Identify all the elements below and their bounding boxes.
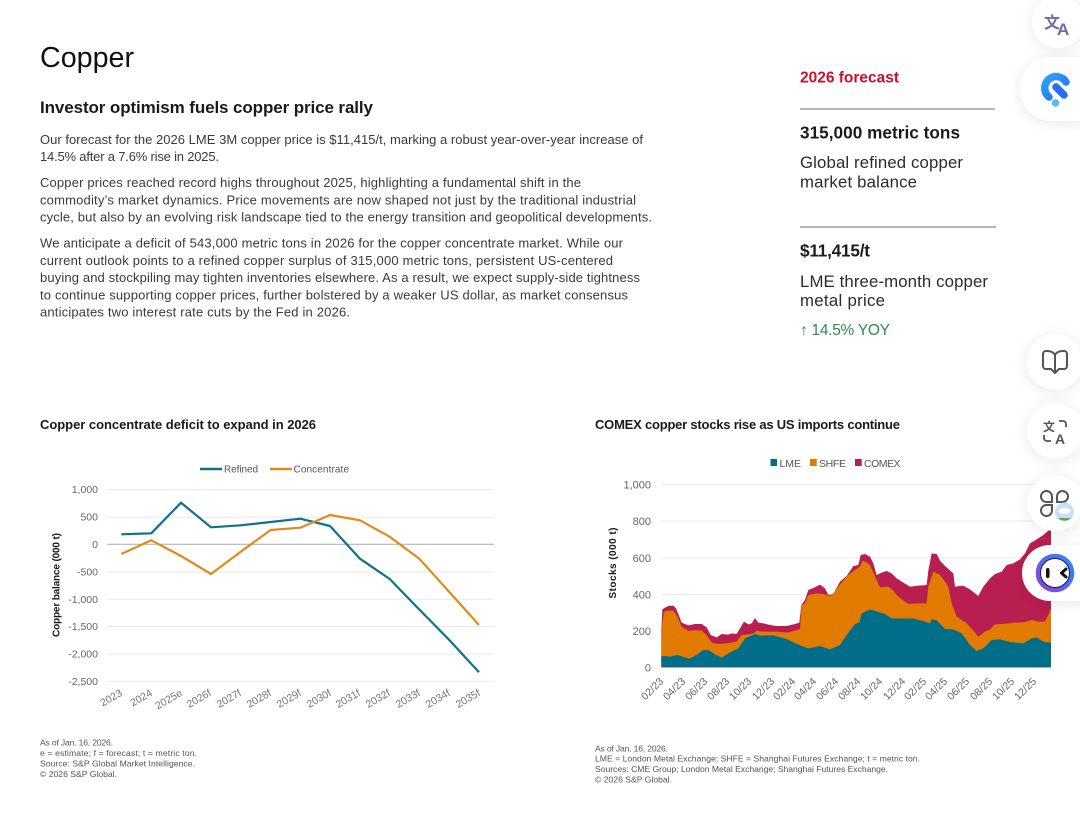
right footnote: Sources: CME Group; London Metal Exchange; Shanghai Futures Exchange.: [595, 764, 888, 774]
x axis labels: 2023: [98, 687, 125, 709]
stat: LME price: metal price: [800, 291, 885, 310]
x axis labels: [98, 687, 483, 712]
browser overlay: translate button: A: [1057, 20, 1069, 39]
x axis labels: 2029f: [275, 687, 304, 711]
left footnote: [40, 738, 197, 779]
x axis labels: 2024: [128, 687, 155, 709]
body text: anticipates two interest rate cuts by the Fed in 2026.: [40, 304, 350, 320]
x axis labels: 2027f: [215, 687, 244, 711]
x axis labels: 2031f: [334, 687, 363, 711]
stat: refined balance: Global refined copper: [800, 153, 963, 172]
y axis labels: 500: [80, 512, 98, 524]
body text: commodity’s market dynamics. Price movements are now shaped not just by the traditional industrial: [40, 192, 636, 208]
x axis labels: 2035f: [454, 687, 483, 711]
forecast heading: 2026 forecast: [800, 70, 899, 86]
body text: [40, 132, 652, 320]
stacked area chart: copper stocks: [608, 458, 1051, 703]
x axis labels: 2032f: [364, 687, 393, 711]
legend: refined and concentrate: Refined: [224, 464, 258, 476]
x axis labels: 06/24: [814, 676, 841, 703]
body text: buying and stockpiling may tighten inventories elsewhere. As a result, we expect supply-side tightness: [40, 270, 640, 285]
left footnote: © 2026 S&P Global.: [40, 769, 117, 779]
browser overlay: book button: [1027, 334, 1080, 390]
y axis labels: 1,000: [623, 479, 651, 491]
browser overlay: assistant pill: [1020, 57, 1080, 121]
subheading: Investor optimism fuels copper price rally: [40, 98, 374, 117]
y axis labels: -2,500: [68, 676, 98, 688]
legend: LME, SHFE, COMEX: COMEX: [864, 458, 900, 470]
x axis labels: 04/24: [792, 676, 819, 703]
browser overlay: translate scan button: [1027, 403, 1080, 459]
series areas: [661, 528, 1051, 667]
legend: LME, SHFE, COMEX: SHFE: [819, 458, 846, 470]
x axis labels: 02/23: [639, 676, 666, 703]
x axis labels: 12/24: [881, 676, 908, 703]
browser overlay: translate button: [1032, 0, 1080, 48]
x axis labels: 10/23: [727, 676, 754, 703]
stat: LME price: [800, 240, 988, 310]
browser overlay: apps button: [1027, 475, 1080, 531]
right chart title: COMEX copper stocks rise as US imports continue: [595, 417, 900, 432]
x axis labels: 02/24: [771, 676, 798, 703]
y axis labels: [623, 479, 651, 674]
panel: 2026 forecast: [800, 70, 996, 339]
legend: LME, SHFE, COMEX: LME: [780, 458, 801, 470]
x axis labels: 2033f: [394, 687, 423, 711]
y axis labels: -2,000: [68, 648, 98, 660]
browser overlay: translate scan button: 文: [1043, 419, 1055, 434]
x axis labels: 2034f: [424, 687, 453, 711]
y axis labels: 400: [633, 589, 651, 601]
right footnote: © 2026 S&P Global.: [595, 774, 672, 784]
right footnote: LME = London Metal Exchange; SHFE = Shanghai Futures Exchange; t = metric ton.: [595, 754, 920, 764]
y axis title: Copper balance (000 t): [52, 533, 62, 637]
area: LME: [661, 609, 1051, 667]
legend: LME, SHFE, COMEX: [770, 458, 900, 470]
y axis labels: 0: [645, 662, 651, 674]
x axis labels: 08/23: [705, 676, 732, 703]
body text: current outlook points to a refined copper surplus of 315,000 metric tons, persistent US-centered: [40, 253, 613, 268]
y axis labels: 200: [633, 626, 651, 638]
x axis labels: 04/25: [923, 676, 950, 703]
y axis labels: 800: [633, 516, 651, 528]
browser overlay: chat pill: [1022, 545, 1080, 601]
area: SHFE: [661, 561, 1051, 667]
left chart title: Copper concentrate deficit to expand in 2026: [40, 417, 316, 432]
x axis labels: 2030f: [305, 687, 334, 711]
y axis title: Stocks (000 t): [608, 528, 619, 598]
x axis labels: 04/23: [661, 676, 688, 703]
body text: Copper prices reached record highs throughout 2025, highlighting a fundamental shift in the: [40, 175, 581, 190]
body text: to continue supporting copper prices, further bolstered by a weaker US dollar, as market consensus: [40, 288, 628, 302]
browser overlay: translate scan button: A: [1055, 431, 1065, 447]
x axis labels: 02/25: [902, 676, 929, 703]
area: COMEX: [661, 528, 1051, 667]
year-over-year change: ↑ 14.5% YOY: [800, 322, 890, 339]
x axis labels: 2028f: [245, 687, 274, 711]
line chart: copper balance: [52, 464, 494, 712]
x axis labels: 10/24: [858, 676, 885, 703]
y axis labels: 0: [92, 539, 98, 551]
body text: 14.5% after a 7.6% rise in 2025.: [40, 149, 219, 164]
y axis labels: -500: [77, 566, 98, 578]
x axis labels: 2025e: [153, 687, 185, 712]
legend: refined and concentrate: [200, 464, 349, 476]
y axis labels: 1,000: [72, 484, 98, 496]
stat: refined balance: [800, 122, 963, 192]
left footnote: Source: S&P Global Market Intelligence.: [40, 758, 195, 768]
right footnote: As of Jan. 16, 2026.: [595, 744, 668, 754]
x axis labels: 08/25: [968, 676, 995, 703]
y axis labels: -1,000: [68, 594, 98, 606]
series: refined: [121, 503, 479, 672]
stat: LME price: LME three-month copper: [800, 272, 988, 291]
left footnote: e = estimate; f = forecast; t = metric ton.: [40, 748, 197, 758]
stat: refined balance: market balance: [800, 172, 917, 192]
legend: refined and concentrate: Concentrate: [294, 464, 349, 476]
body text: Our forecast for the 2026 LME 3M copper price is $11,415/t, marking a robust year-over-year increase of: [40, 132, 643, 147]
left footnote: As of Jan. 16, 2026.: [40, 738, 113, 748]
y axis labels: 600: [633, 553, 651, 565]
body text: cycle, but also by an evolving risk landscape tied to the energy transition and geopolitical developments.: [40, 210, 652, 224]
x axis labels: 10/25: [990, 676, 1017, 703]
y axis labels: [68, 484, 98, 688]
title: Copper: [40, 42, 134, 74]
x axis labels: 06/25: [945, 676, 972, 703]
x axis labels: 12/23: [750, 676, 777, 703]
x axis labels: 08/24: [836, 676, 863, 703]
series: concentrate: [121, 515, 479, 625]
y axis labels: -1,500: [68, 621, 98, 633]
stat: refined balance: 315,000 metric tons: [800, 122, 960, 142]
x axis labels: 12/25: [1012, 676, 1039, 703]
x axis labels: 2026f: [185, 687, 214, 711]
x axis labels: [639, 676, 1039, 703]
stat: LME price: $11,415/t: [800, 240, 870, 260]
browser overlay: translate button: 文: [1044, 13, 1060, 32]
x axis labels: 06/23: [683, 676, 710, 703]
body text: We anticipate a deficit of 543,000 metric tons in 2026 for the copper concentrate market. While our: [40, 236, 624, 250]
right footnote: [595, 744, 920, 784]
